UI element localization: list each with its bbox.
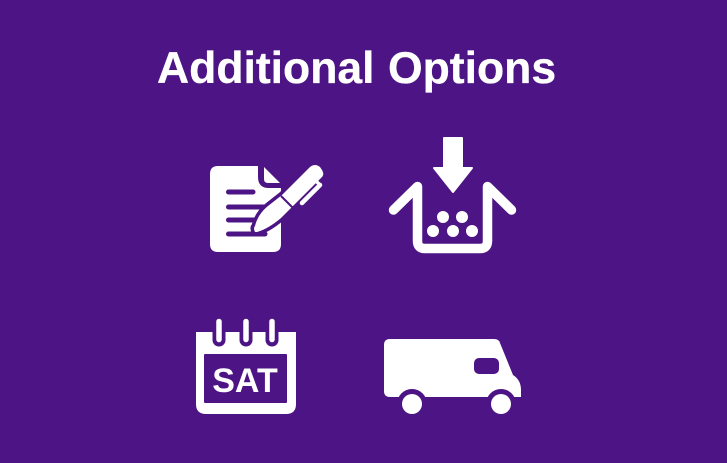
title: Additional (157, 44, 375, 93)
calendar label: SAT (212, 362, 278, 400)
icon: delivery van (384, 339, 521, 419)
icon: document with pen (210, 165, 323, 252)
icon: Saturday calendar (196, 322, 296, 414)
icon: box with down arrow and dots (394, 138, 512, 248)
title: Options (388, 44, 556, 93)
